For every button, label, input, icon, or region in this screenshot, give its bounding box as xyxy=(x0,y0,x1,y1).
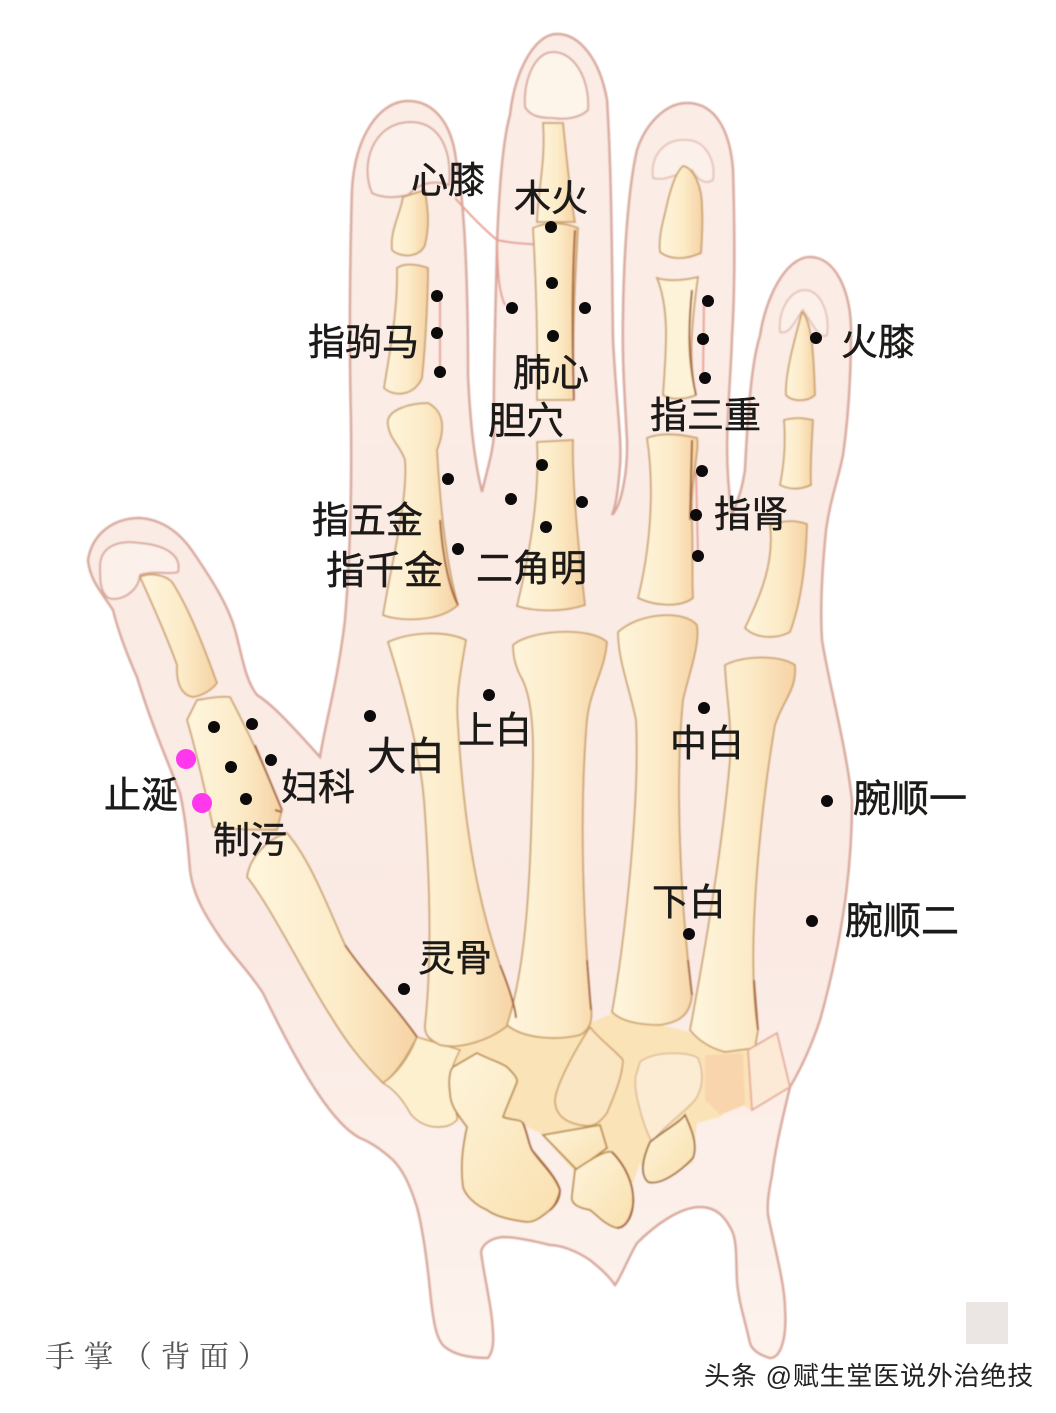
grey square mark xyxy=(966,1302,1008,1344)
label: 下白: 下白 xyxy=(652,882,726,923)
carpal bones xyxy=(449,1027,790,1228)
label: 指三重: 指三重 xyxy=(650,395,761,436)
nails and fingertip pads xyxy=(100,52,828,599)
label: 火膝: 火膝 xyxy=(841,322,915,363)
label: 制污: 制污 xyxy=(213,820,287,861)
acupoint dots xyxy=(208,221,833,995)
label: 指肾: 指肾 xyxy=(714,494,788,535)
label: 指驹马: 指驹马 xyxy=(308,322,419,363)
caption: 手掌（背面） xyxy=(45,1341,276,1374)
hand illustration xyxy=(88,34,852,1358)
label: 肺心: 肺心 xyxy=(513,353,589,395)
label: 心膝: 心膝 xyxy=(411,160,485,201)
label: 中白: 中白 xyxy=(670,723,744,764)
label: 灵骨: 灵骨 xyxy=(418,938,492,979)
label: 木火: 木火 xyxy=(514,178,588,219)
finger bones xyxy=(383,123,815,637)
trapezium piece xyxy=(383,1037,460,1127)
thumb bones xyxy=(140,575,417,1083)
label: 腕顺一: 腕顺一 xyxy=(853,779,967,821)
label: 妇科: 妇科 xyxy=(281,767,355,808)
metacarpal bones xyxy=(388,615,795,1052)
label: 指五金: 指五金 xyxy=(312,500,423,541)
label: 二角明: 二角明 xyxy=(476,548,587,589)
label: 腕顺二: 腕顺二 xyxy=(845,901,959,943)
dark bone edges xyxy=(255,230,758,1228)
label: 止涎: 止涎 xyxy=(104,775,178,816)
carpal base xyxy=(417,1013,790,1183)
highlighted acupoints xyxy=(176,749,212,813)
label: 胆穴: 胆穴 xyxy=(488,401,564,443)
label: 指千金: 指千金 xyxy=(326,550,443,593)
red meridian lines xyxy=(440,198,704,556)
label: 大白: 大白 xyxy=(367,736,445,779)
hand outline xyxy=(88,34,852,1358)
watermark: 头条 @赋生堂医说外治绝技 xyxy=(704,1361,1034,1391)
label: 上白: 上白 xyxy=(458,710,532,751)
